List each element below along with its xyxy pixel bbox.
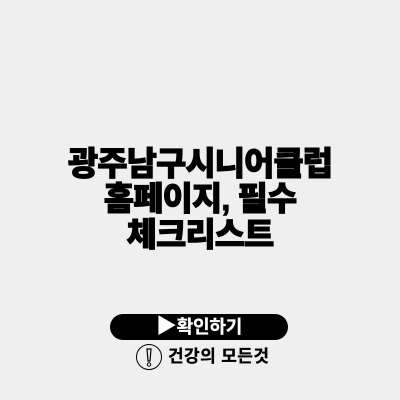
icon: exclamation circle xyxy=(136,344,162,370)
title xyxy=(68,145,332,253)
button: confirm xyxy=(110,314,288,340)
title: 체크리스트 xyxy=(127,216,273,253)
title: 광주남구시니어클럽 xyxy=(68,145,332,182)
title: 홈페이지, 필수 xyxy=(104,180,296,217)
caption: 건강의 모든것 xyxy=(168,347,269,366)
button: confirm: ▶확인하기 xyxy=(156,315,242,338)
